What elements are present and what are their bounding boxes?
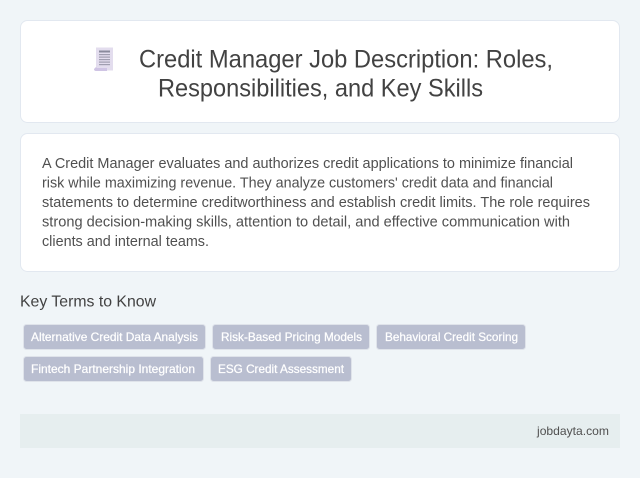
chip: risk-based pricing models: Risk-Based Pricing Models — [221, 330, 362, 344]
text block: description: A Credit Manager evaluates and authorizes credit applications to minimize financial — [42, 156, 573, 172]
chip: alternative credit data analysis: Alternative Credit Data Analysis — [31, 330, 198, 344]
chip: fintech partnership integration — [24, 356, 204, 382]
text block: description: statements to determine creditworthiness and establish credit limits. The role requires — [42, 195, 590, 211]
icon: paper receipt — [94, 48, 113, 71]
footer bar — [20, 414, 620, 448]
text block: description: risk while maximizing revenue. They analyze customers' credit data and financial — [42, 176, 553, 192]
footer text: jobdayta.com — [536, 424, 609, 438]
chip: behavioral credit scoring — [376, 324, 526, 350]
panel: title card — [20, 20, 620, 122]
chip: behavioral credit scoring: Behavioral Credit Scoring — [385, 330, 518, 344]
chip: risk-based pricing models — [212, 324, 370, 350]
chip: esg credit assessment: ESG Credit Assessment — [218, 362, 345, 376]
text block: description — [42, 156, 590, 250]
panel: key term chips — [24, 324, 526, 382]
title: Responsibilities, and Key Skills — [158, 74, 483, 102]
text block: description: strong decision-making skills, attention to detail, and effective communication with — [42, 214, 570, 230]
chip: alternative credit data analysis — [24, 324, 206, 350]
heading: key terms: Key Terms to Know — [20, 294, 156, 310]
text block: description: clients and internal teams. — [42, 234, 209, 250]
title — [139, 46, 553, 102]
panel: description — [20, 134, 620, 272]
chip: fintech partnership integration: Fintech Partnership Integration — [31, 362, 195, 376]
title: Credit Manager Job Description: Roles, — [139, 46, 553, 74]
chip: esg credit assessment — [210, 356, 352, 382]
